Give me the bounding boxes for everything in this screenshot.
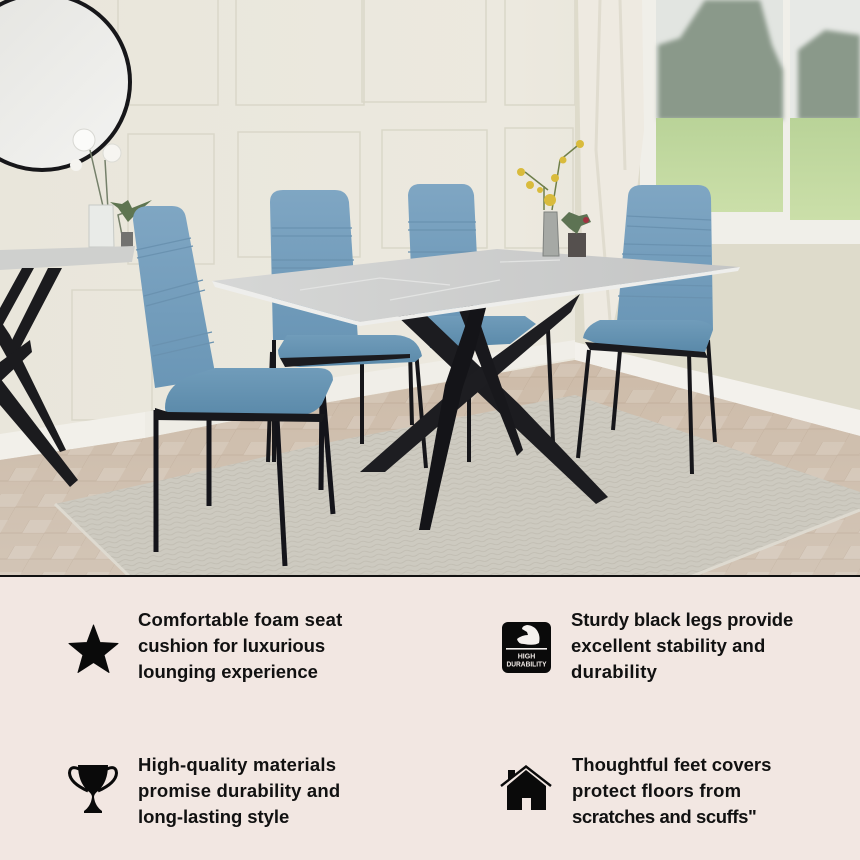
- text: feet covers: [572, 754, 771, 827]
- chair: back middle: [408, 184, 553, 462]
- icon: high durability badge: HIGH: [518, 654, 535, 660]
- window: [640, 0, 860, 244]
- chair: front left: [133, 206, 333, 566]
- text: foam seat: lounging experience: [138, 661, 318, 682]
- icon: star: [68, 624, 118, 673]
- text: feet covers: Thoughtful feet covers: [572, 754, 771, 775]
- text: feet covers: scratches and scuffs": [572, 806, 756, 827]
- feature: feet covers: [500, 754, 771, 827]
- text: quality materials: High-quality materials: [138, 754, 336, 775]
- text: foam seat: [138, 609, 342, 682]
- feature: sturdy legs: [502, 609, 793, 682]
- text: sturdy legs: durability: [571, 661, 657, 682]
- icon: trophy: [68, 765, 118, 813]
- side table left: [0, 246, 135, 487]
- mirror: [0, 0, 130, 170]
- icon: house: [500, 765, 552, 810]
- chair: back left: [268, 190, 426, 468]
- vases on table: [517, 140, 591, 257]
- table top: [212, 249, 740, 322]
- text: quality materials: promise durability and: [138, 780, 340, 801]
- text: quality materials: long-lasting style: [138, 806, 289, 827]
- curtain: [578, 0, 644, 340]
- icon: high durability badge: DURABILITY: [506, 662, 547, 668]
- text: sturdy legs: excellent stability and: [571, 635, 765, 656]
- feature: quality materials: [68, 754, 340, 827]
- table: [212, 249, 740, 530]
- feature: foam seat: [68, 609, 342, 682]
- text: foam seat: cushion for luxurious: [138, 635, 325, 656]
- text: sturdy legs: [571, 609, 793, 682]
- text: sturdy legs: Sturdy black legs provide: [571, 609, 793, 630]
- photo: dining room scene: [0, 0, 860, 577]
- rug: [55, 395, 860, 577]
- chair: right: [578, 185, 715, 474]
- divider line: [0, 575, 860, 577]
- text: quality materials: [138, 754, 340, 827]
- text: foam seat: Comfortable foam seat: [138, 609, 342, 630]
- table legs: [360, 294, 608, 530]
- text: feet covers: protect floors from: [572, 780, 741, 801]
- wall plants: [70, 129, 152, 250]
- floor: [0, 360, 860, 577]
- wall: [0, 0, 860, 470]
- icon: high durability badge: [502, 622, 551, 673]
